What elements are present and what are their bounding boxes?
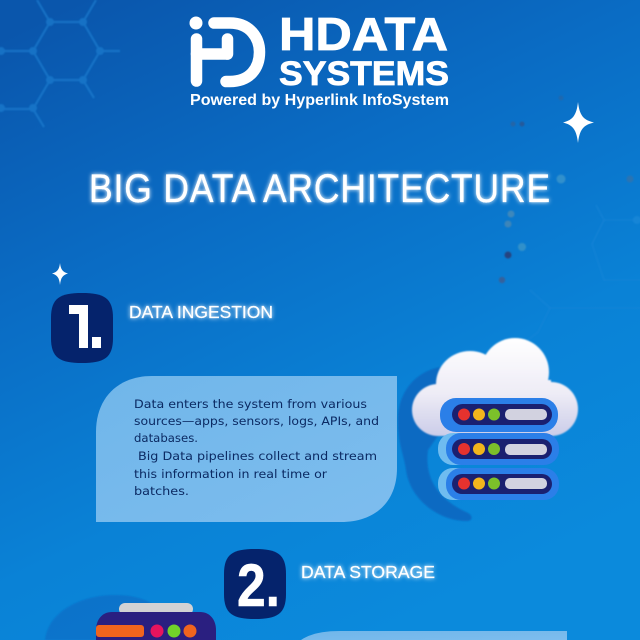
section 1	[51, 293, 578, 522]
server unit 3	[438, 468, 559, 500]
title: BIG DATA ARCHITECTURE	[89, 167, 551, 211]
hexagon network: top left	[0, 0, 120, 127]
hexagon network: right side	[515, 205, 640, 350]
logo tagline: Powered by Hyperlink InfoSystem	[190, 92, 449, 109]
text panel: data ingestion: databases.	[134, 431, 198, 445]
icon: large sparkle	[563, 102, 594, 143]
logo wordmark: SYSTEMS: SYSTEMS	[279, 55, 449, 93]
heading: data storage: DATA STORAGE	[301, 562, 435, 582]
icon: cloud server	[398, 338, 578, 521]
logo wordmark: HDATA: HDATA	[279, 8, 448, 60]
text panel: data ingestion: sources—apps, sensors, logs, APIs, and	[134, 414, 379, 428]
server unit 2	[438, 433, 559, 465]
icon: small sparkle	[52, 263, 68, 285]
section 2	[45, 549, 567, 640]
server unit 1	[440, 398, 558, 432]
heading: data ingestion: DATA INGESTION	[129, 302, 273, 322]
number badge 1	[51, 293, 113, 363]
logo mark: iHD monogram	[190, 16, 260, 82]
logo	[190, 8, 449, 109]
text panel: data ingestion: Data enters the system from various	[134, 397, 367, 411]
text panel: data ingestion: batches.	[134, 484, 189, 498]
text panel: data ingestion: this information in real time or	[134, 467, 327, 481]
scattered data dots	[499, 96, 634, 283]
icon: database cylinder	[45, 595, 216, 640]
text panel: data storage, cropped	[301, 631, 567, 640]
number badge 2: 2.	[237, 552, 280, 619]
text panel: data ingestion	[96, 376, 397, 522]
text panel: data ingestion: Big Data pipelines collect and stream	[138, 449, 377, 463]
